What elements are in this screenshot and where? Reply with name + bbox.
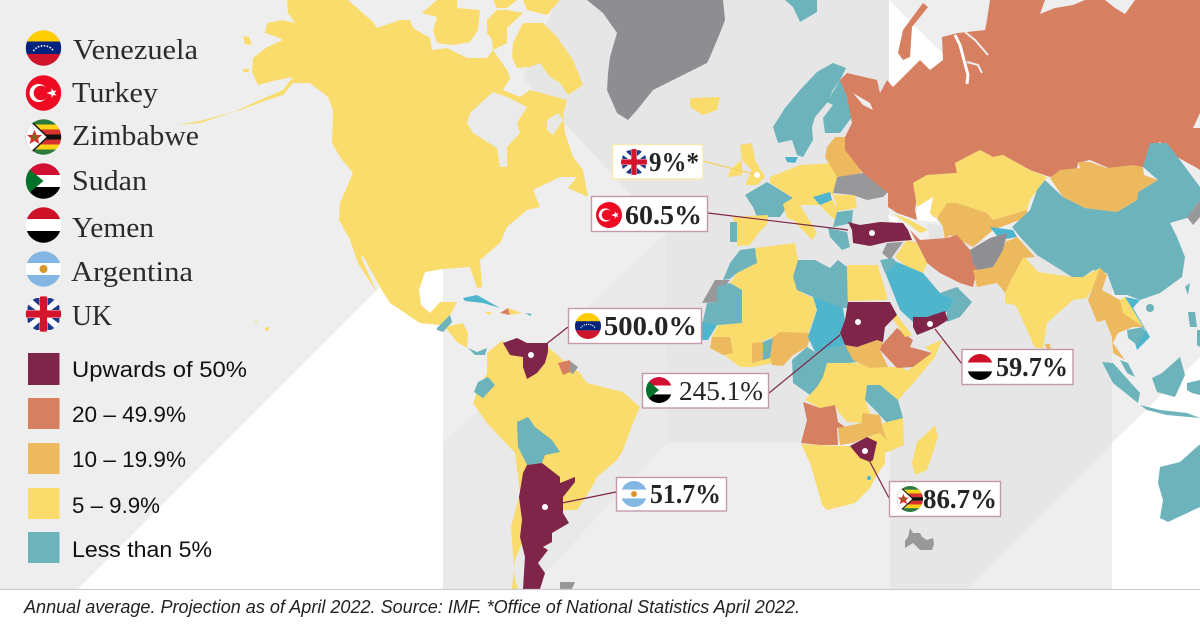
Sudan entry bbox=[26, 163, 147, 199]
Middle East bbox=[880, 240, 972, 322]
20 to 49.9%: 20 – 49.9% bbox=[72, 402, 186, 427]
Ungava Bay bbox=[547, 113, 563, 135]
Sudan entry: Sudan bbox=[72, 166, 147, 197]
country: Turkey bbox=[848, 222, 912, 246]
country: Argentina bbox=[519, 463, 575, 589]
country: Zimbabwe bbox=[850, 437, 877, 462]
20 to 49.9% bbox=[28, 398, 186, 429]
callout: Yemen 59.7% bbox=[962, 350, 1073, 384]
callout: Turkey 60.5% bbox=[592, 196, 708, 232]
country: Venezuela bbox=[503, 338, 548, 379]
UK entry: UK bbox=[72, 301, 112, 332]
callout: Turkey 60.5%: 60.5% bbox=[625, 200, 702, 230]
callout: Zimbabwe 86.7% bbox=[890, 482, 1000, 516]
Venezuela entry: Venezuela bbox=[73, 35, 199, 66]
callout: Sudan 245.1% bbox=[642, 374, 768, 408]
10 to 19.9%: 10 – 19.9% bbox=[72, 447, 186, 472]
footer source note bbox=[0, 589, 1200, 627]
country: Yemen bbox=[913, 311, 948, 335]
Yemen entry bbox=[26, 207, 154, 244]
10 to 19.9% bbox=[28, 443, 186, 474]
Argentina entry bbox=[26, 251, 194, 288]
upwards of 50%: Upwards of 50% bbox=[72, 357, 247, 382]
callout: Argentina 51.7%: 51.7% bbox=[650, 479, 721, 509]
Central and South Asia bbox=[888, 143, 1200, 360]
callout: Yemen 59.7%: 59.7% bbox=[996, 352, 1068, 382]
Africa bbox=[702, 243, 942, 550]
callout: UK 9%* bbox=[612, 144, 703, 179]
footer source note: Annual average. Projection as of April 2022. Source: IMF. *Office of National Statistics April 2022. bbox=[23, 597, 800, 617]
Maritime Southeast Asia and Australia bbox=[1102, 283, 1200, 522]
5 to 9.9% bbox=[28, 488, 160, 519]
Hudson Bay bbox=[467, 92, 527, 167]
Greenland and Iceland bbox=[587, 0, 725, 120]
South America bbox=[473, 340, 640, 589]
callout: Venezuela 500.0% bbox=[568, 308, 702, 344]
Argentina entry: Argentina bbox=[71, 257, 194, 288]
less than 5% bbox=[28, 532, 212, 563]
UK entry bbox=[26, 296, 112, 332]
Venezuela entry bbox=[26, 30, 199, 66]
Zimbabwe entry bbox=[26, 119, 199, 155]
leader lines and location dots bbox=[528, 161, 962, 510]
callout: UK 9%*: 9%* bbox=[649, 147, 699, 177]
callout: Zimbabwe 86.7%: 86.7% bbox=[923, 484, 997, 514]
North America bbox=[177, 0, 588, 331]
Europe bbox=[728, 0, 890, 250]
Zimbabwe entry: Zimbabwe bbox=[72, 121, 199, 152]
country: Sudan bbox=[840, 302, 897, 347]
upwards of 50% bbox=[28, 353, 247, 385]
callout: Venezuela 500.0%: 500.0% bbox=[604, 311, 697, 341]
callout: Argentina 51.7% bbox=[616, 478, 726, 511]
less than 5%: Less than 5% bbox=[72, 537, 212, 562]
legend: inflation colour scale bbox=[28, 353, 247, 563]
callout: Sudan 245.1%: 245.1% bbox=[679, 376, 763, 406]
5 to 9.9%: 5 – 9.9% bbox=[72, 493, 160, 518]
Central America and Caribbean bbox=[437, 295, 532, 355]
Yemen entry: Yemen bbox=[72, 213, 154, 244]
Turkey entry: Turkey bbox=[72, 78, 158, 109]
Russia bbox=[840, 0, 1200, 220]
Turkey entry bbox=[26, 75, 158, 111]
legend: country flags bbox=[26, 30, 199, 332]
